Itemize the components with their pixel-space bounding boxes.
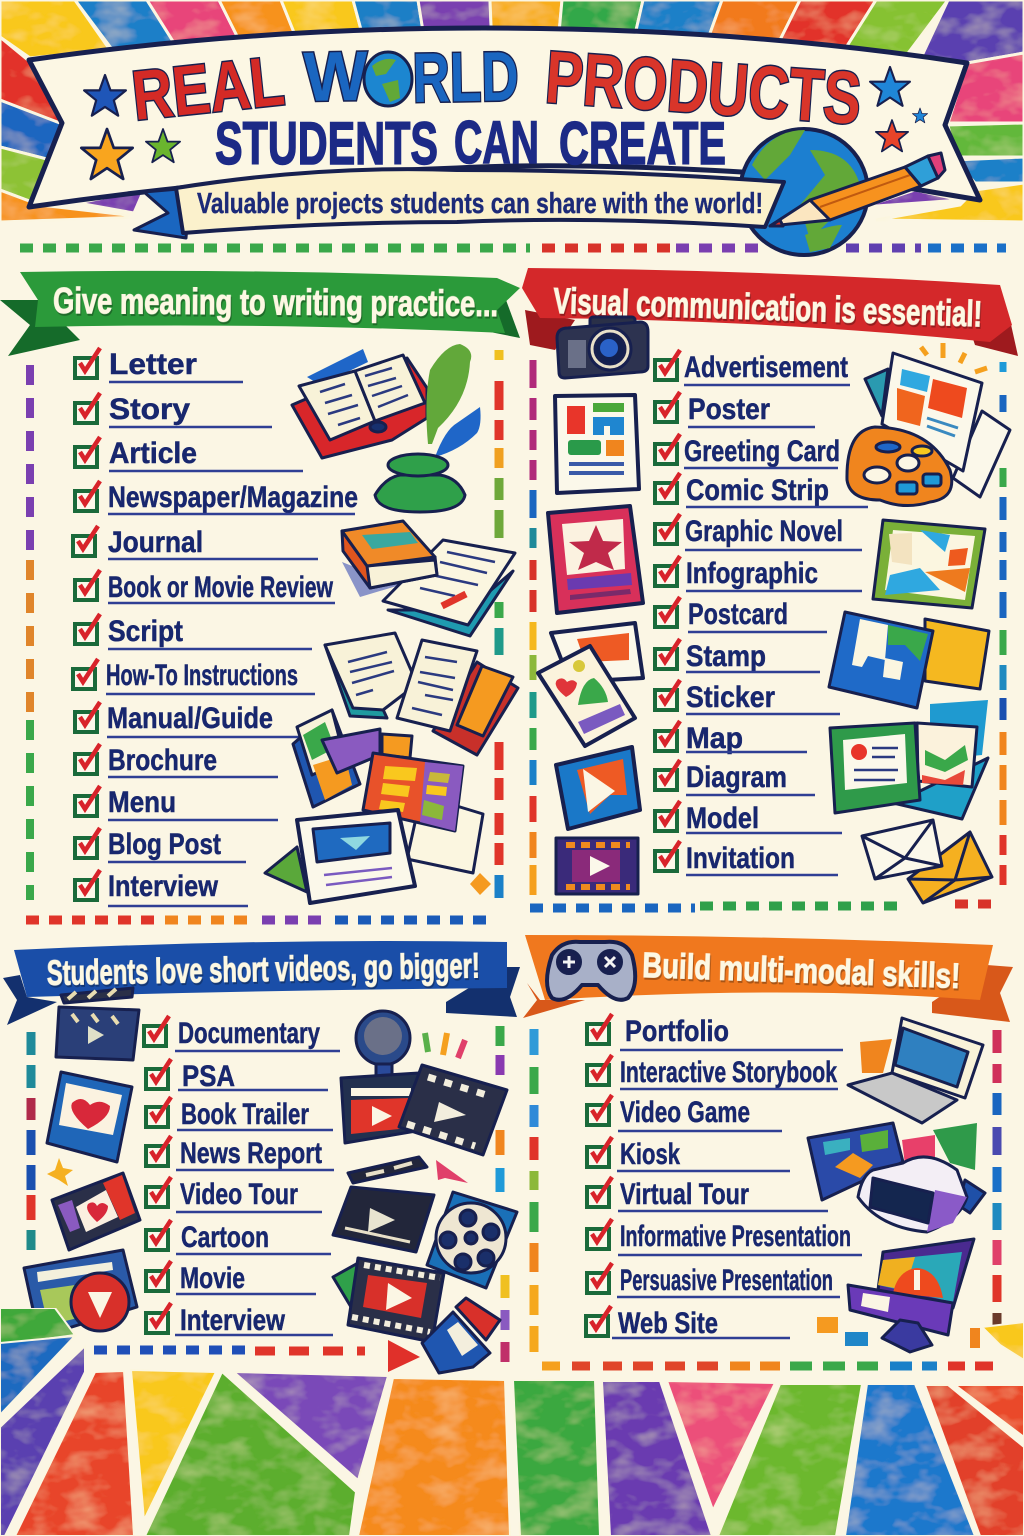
icon: globe letter O xyxy=(364,52,412,106)
icon: envelopes xyxy=(862,820,992,903)
divider: top dashed line xyxy=(20,244,1006,252)
icon: map cards xyxy=(829,612,989,708)
item: Book Trailer: Book Trailer xyxy=(181,1098,309,1131)
item: PSA: PSA xyxy=(182,1060,235,1093)
icon: pencil xyxy=(770,153,945,226)
ribbon: subtitle tagline: Valuable projects students can share with the world! xyxy=(197,188,763,220)
icon: camera xyxy=(557,317,648,378)
item: Persuasive Presentation: Persuasive Presentation xyxy=(620,1264,833,1297)
subtitle: Students Can Create: STUDENTS xyxy=(215,110,438,177)
item: Script: Script xyxy=(108,615,183,648)
bottom dashes and arrow xyxy=(94,1340,420,1372)
panel border dashes xyxy=(534,1029,997,1352)
item: How-To Instructions xyxy=(73,659,315,694)
item: Invitation: Invitation xyxy=(686,842,795,875)
item: Interview: Interview xyxy=(108,870,219,903)
decorative squares xyxy=(817,1317,980,1348)
item: Infographic: Infographic xyxy=(686,557,818,590)
subtitle: Students Can Create: CREATE xyxy=(559,110,726,177)
item: Letter xyxy=(75,348,243,382)
item: News Report: News Report xyxy=(180,1137,322,1170)
item: Story xyxy=(75,393,272,427)
icon: laptop xyxy=(848,1018,983,1123)
icon: film reel xyxy=(427,1192,517,1288)
ribbon heading: visual xyxy=(522,268,1018,356)
title: Real World Products: RLD xyxy=(412,37,519,117)
icon: star poster xyxy=(548,506,643,613)
item: Stamp xyxy=(655,639,820,673)
item: Article xyxy=(75,437,303,471)
item: Interview xyxy=(146,1303,333,1337)
item: Map xyxy=(655,721,807,755)
top sunburst rays xyxy=(0,0,1024,222)
ribbon heading: videos: Students love short videos, go bigger! xyxy=(46,946,480,993)
item: Movie xyxy=(146,1261,316,1295)
bottom colored stripes xyxy=(0,1308,1024,1536)
ribbon heading: writing: Give meaning to writing practice... xyxy=(53,280,498,324)
title banner xyxy=(29,28,980,207)
item: Graphic Novel: Graphic Novel xyxy=(685,515,843,548)
item: Interview: Interview xyxy=(180,1304,286,1337)
icon: poster and palette xyxy=(847,343,1010,506)
item: Video Tour: Video Tour xyxy=(180,1178,298,1211)
item: Interactive Storybook xyxy=(587,1055,838,1089)
item: Book or Movie Review: Book or Movie Review xyxy=(108,571,333,604)
item: Comic Strip: Comic Strip xyxy=(686,474,829,507)
item: News Report xyxy=(146,1136,334,1170)
icon: open book xyxy=(292,349,427,458)
ribbon: subtitle tagline xyxy=(134,169,784,238)
icon: film frame xyxy=(333,1258,444,1342)
icon: play card xyxy=(556,747,640,829)
item: Advertisement xyxy=(655,350,850,385)
item: Postcard: Postcard xyxy=(688,598,788,631)
icon: quill and inkwell xyxy=(426,344,481,457)
subtitle: Students Can Create xyxy=(215,109,726,177)
icon: clapperboard large xyxy=(333,1157,468,1252)
item: Letter: Letter xyxy=(109,348,197,381)
panel: visual communication xyxy=(522,268,1018,908)
icon: monitor xyxy=(848,1239,974,1352)
icon: layout card xyxy=(555,395,639,493)
title: Real World Products xyxy=(128,35,864,140)
icon: stacked papers xyxy=(325,633,518,755)
icon: microphone and camera xyxy=(341,1011,465,1143)
item: Journal: Journal xyxy=(108,526,203,559)
icon: film heart xyxy=(52,1173,140,1250)
icon: brochure cluster xyxy=(293,710,483,873)
item: Blog Post: Blog Post xyxy=(108,828,221,861)
item: Documentary xyxy=(144,1016,340,1051)
item: Portfolio: Portfolio xyxy=(625,1015,729,1048)
title: Real World Products: PRODUCTS xyxy=(543,35,864,140)
item: Advertisement: Advertisement xyxy=(684,351,848,384)
item: Movie: Movie xyxy=(180,1262,245,1295)
item: Journal xyxy=(73,526,318,559)
icon: play button card xyxy=(24,1250,137,1337)
item: Kiosk xyxy=(587,1137,790,1171)
item: Article: Article xyxy=(109,437,197,470)
panel border dashes xyxy=(31,1026,505,1362)
item: Menu: Menu xyxy=(108,786,176,819)
item: Video Game: Video Game xyxy=(620,1096,750,1129)
item: Brochure: Brochure xyxy=(108,744,217,777)
item: Documentary: Documentary xyxy=(178,1017,320,1050)
item: PSA xyxy=(146,1059,328,1093)
item: Sticker: Sticker xyxy=(686,681,775,714)
item: Greeting Card: Greeting Card xyxy=(684,435,840,468)
bottom dashes xyxy=(542,1362,993,1370)
item: Virtual Tour: Virtual Tour xyxy=(620,1178,749,1211)
item: Web Site: Web Site xyxy=(618,1307,718,1340)
item: Persuasive Presentation xyxy=(587,1263,840,1297)
item: Portfolio xyxy=(587,1014,843,1050)
item: Virtual Tour xyxy=(587,1177,828,1211)
icon: photo card xyxy=(538,646,635,746)
item: Script xyxy=(75,614,312,649)
panel: writing xyxy=(0,271,520,920)
icon: screens and VR headset xyxy=(808,1123,985,1232)
item: Informative Presentation xyxy=(587,1219,862,1255)
icon: film cube xyxy=(422,1298,500,1373)
icon: document cards xyxy=(830,700,988,819)
item: Poster xyxy=(655,392,815,427)
item: Interview xyxy=(75,870,248,906)
title: Real World Products: W xyxy=(303,37,368,116)
icon: inkwell xyxy=(375,454,465,512)
item: How-To Instructions: How-To Instructions xyxy=(106,659,298,692)
subtitle: Students Can Create: CAN xyxy=(454,109,539,176)
title: Real World Products: REAL xyxy=(128,41,288,135)
item: Kiosk: Kiosk xyxy=(620,1138,680,1171)
item: Map: Map xyxy=(686,722,743,755)
icon: orange card xyxy=(551,623,643,682)
icon: heart card xyxy=(47,1072,132,1162)
item: Greeting Card xyxy=(655,434,840,468)
item: Newspaper/Magazine: Newspaper/Magazine xyxy=(108,481,358,514)
panel border dashes xyxy=(533,360,1003,895)
item: Model xyxy=(655,801,842,835)
icon: film strip xyxy=(556,838,638,894)
panel: videos xyxy=(3,941,520,1373)
stars xyxy=(81,67,928,179)
item: Stamp: Stamp xyxy=(686,640,766,673)
item: Brochure xyxy=(75,744,278,777)
item: Poster: Poster xyxy=(688,393,770,426)
icon: book and paper xyxy=(342,521,515,636)
panel bottom dashes xyxy=(530,904,1000,908)
item: Cartoon: Cartoon xyxy=(181,1221,269,1254)
item: Menu xyxy=(75,786,278,820)
icon: map xyxy=(873,520,985,608)
ribbon heading: multi-modal xyxy=(523,935,1013,1022)
item: Diagram: Diagram xyxy=(686,761,787,794)
ribbon heading: writing xyxy=(0,271,520,356)
icon: game controller xyxy=(547,942,635,1000)
icon: film strip large xyxy=(399,1065,507,1155)
ribbon heading: videos xyxy=(3,941,520,1025)
item: Model: Model xyxy=(686,802,759,835)
panel border dashes xyxy=(26,350,499,920)
icon: clapperboard small xyxy=(56,988,139,1060)
item: Manual/Guide: Manual/Guide xyxy=(107,702,273,735)
panel: multi-modal xyxy=(523,935,1013,1366)
item: Sticker xyxy=(655,680,840,714)
icon: globe xyxy=(740,129,868,255)
item: Informative Presentation: Informative Presentation xyxy=(620,1220,851,1253)
icon: web card xyxy=(265,810,491,903)
item: Web Site xyxy=(586,1306,790,1340)
item: Interactive Storybook: Interactive Storybook xyxy=(620,1056,837,1089)
icon: star xyxy=(47,1158,73,1186)
item: Book or Movie Review xyxy=(75,570,335,604)
item: Story: Story xyxy=(109,393,190,426)
item: Cartoon xyxy=(146,1220,331,1254)
